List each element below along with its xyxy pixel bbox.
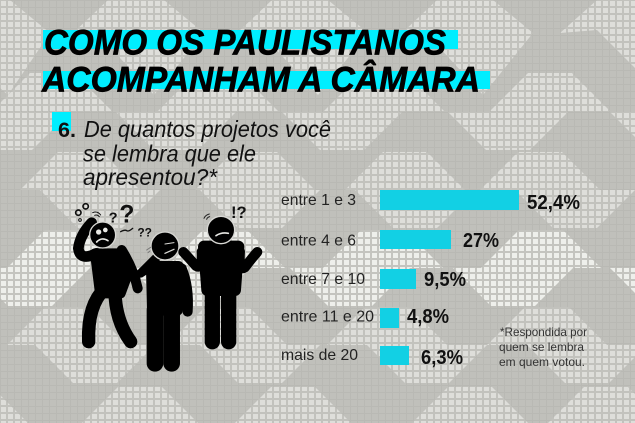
title line 1: COMO OS PAULISTANOS [44, 24, 446, 62]
row: mais de 20: 6,3% [421, 347, 463, 369]
person 1 scratching head [78, 222, 138, 342]
footnote: *Respondida por [500, 325, 587, 339]
row: entre 11 e 20: 4,8% [407, 306, 449, 328]
title [41, 24, 490, 100]
row: entre 1 e 3: 52,4% [527, 192, 580, 214]
row: entre 7 e 10: entre 7 e 10 [281, 271, 365, 288]
confusion marks: ? [109, 210, 118, 226]
question text: De quantos projetos você [84, 116, 331, 142]
question number: 6. [58, 119, 76, 142]
icon: three confused people [76, 201, 257, 363]
question text [83, 116, 331, 190]
confusion marks [76, 201, 247, 240]
row: entre 1 e 3: entre 1 e 3 [281, 192, 356, 209]
bar chart [281, 190, 580, 369]
row: entre 11 e 20 [281, 306, 449, 328]
row: entre 1 e 3 [281, 190, 580, 214]
question text: apresentou?* [83, 164, 218, 190]
row: entre 7 e 10 [281, 269, 466, 291]
row: entre 4 e 6: 27% [463, 230, 499, 252]
confusion marks: !? [231, 203, 247, 222]
person 3 shrugging [183, 214, 257, 342]
title line 2: ACOMPANHAM A CÂMARA [41, 60, 480, 100]
question text: se lembra que ele [83, 140, 256, 166]
row: entre 11 e 20: entre 11 e 20 [281, 308, 374, 326]
footnote: em quem votou. [499, 355, 585, 369]
row: entre 4 e 6: entre 4 e 6 [281, 232, 356, 250]
question number marker [52, 112, 71, 131]
row: mais de 20: mais de 20 [281, 347, 358, 364]
footnote [499, 325, 587, 369]
row: entre 4 e 6 [281, 230, 499, 252]
confusion marks: ? [119, 201, 134, 228]
row: entre 7 e 10: 9,5% [424, 269, 466, 291]
title highlight line 2 [43, 71, 490, 89]
question heading [52, 112, 331, 190]
confusion marks: ?? [137, 226, 152, 240]
footnote: quem se lembra [499, 340, 584, 354]
row: mais de 20 [281, 346, 463, 369]
person 2 hand on chin [141, 232, 188, 363]
title highlight line 1 [43, 30, 458, 49]
